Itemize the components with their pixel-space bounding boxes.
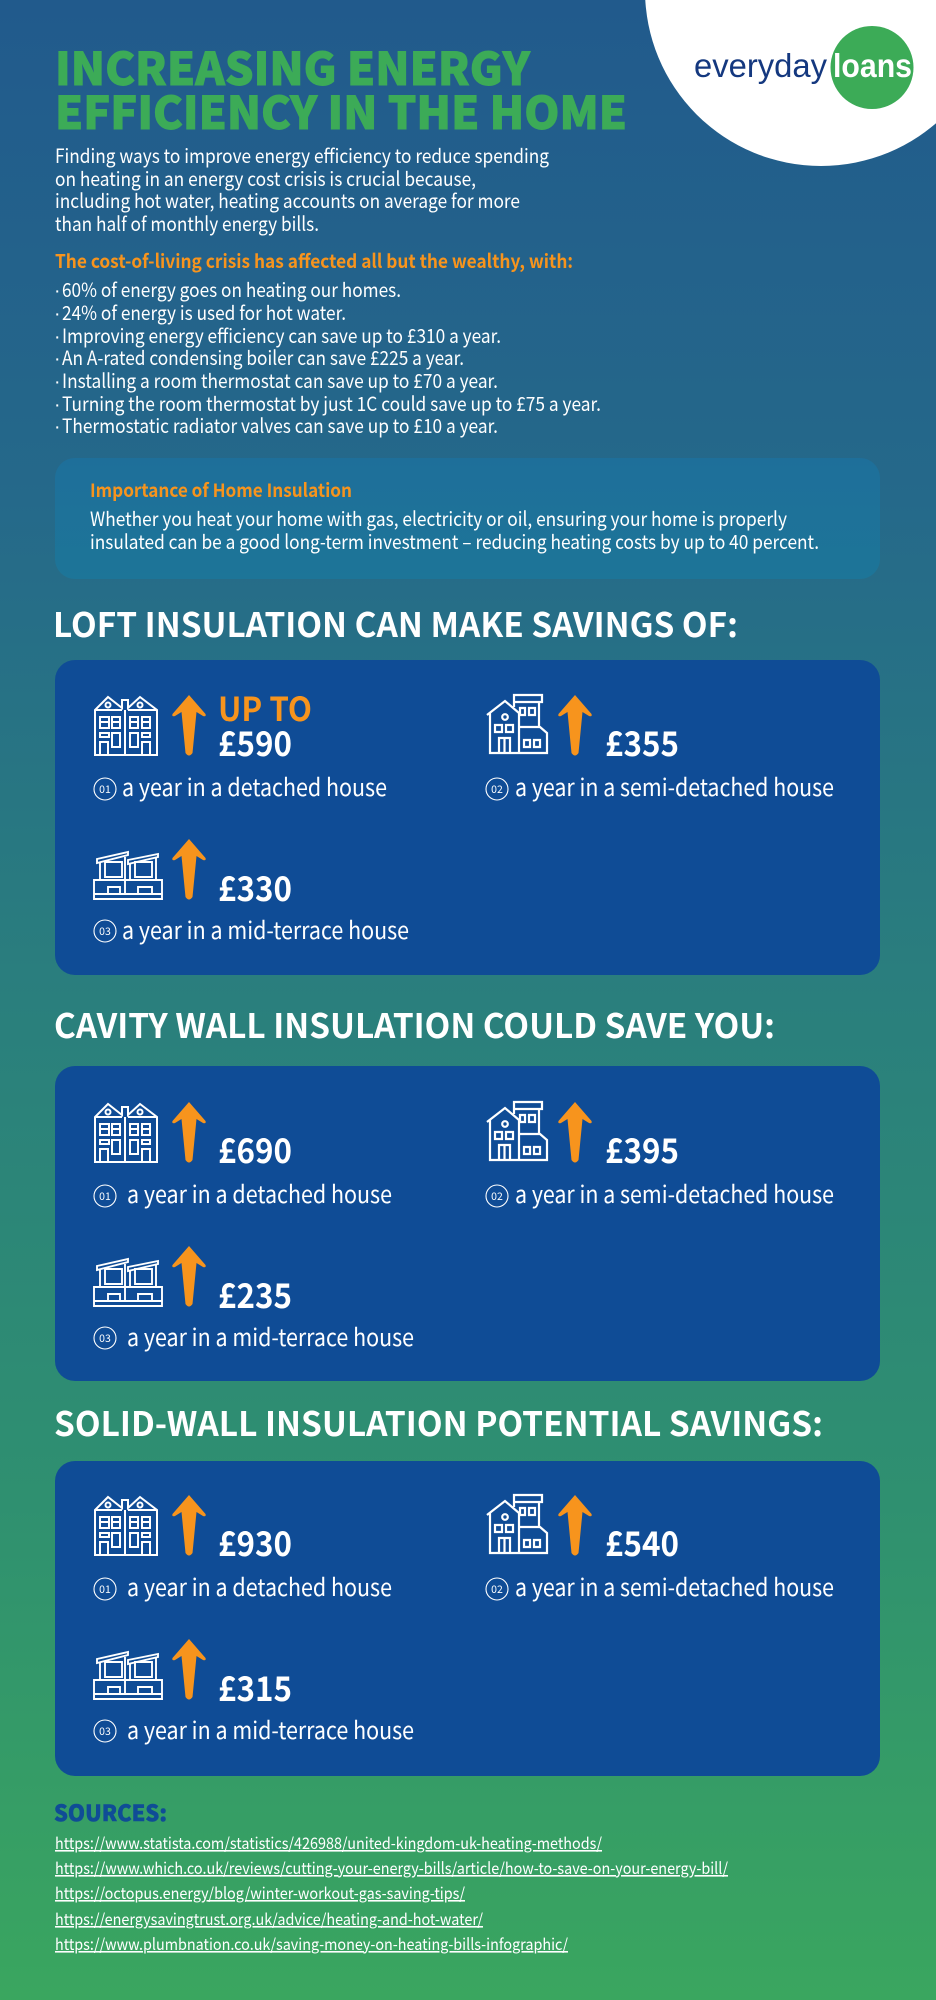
mid-terrace house saving — [94, 1639, 414, 1746]
detached house saving: a year in a detached house — [127, 1568, 392, 1603]
logo badge: loans — [833, 47, 912, 84]
bullet list: Improving energy efficiency can save up to £310 a year. — [62, 320, 501, 349]
semi-detached house saving — [486, 1495, 834, 1603]
bullet list: Thermostatic radiator valves can save up to £10 a year. — [62, 410, 498, 439]
heading: loft insulation: LOFT INSULATION CAN MAKE SAVINGS OF: — [53, 598, 738, 647]
intro paragraph: than half of monthly energy bills. — [55, 208, 319, 237]
detached house saving: £590 — [218, 717, 292, 766]
sources list — [55, 1830, 729, 1955]
heading: cavity wall insulation: CAVITY WALL INSULATION COULD SAVE YOU: — [54, 999, 775, 1048]
logo badge: everyday — [694, 47, 827, 84]
detached house saving: a year in a detached house — [122, 768, 387, 803]
semi-detached house saving: £355 — [605, 717, 679, 766]
semi-detached house saving: a year in a semi-detached house — [515, 1568, 834, 1603]
panel: cavity wall insulation — [55, 1066, 880, 1381]
sources list: https://www.statista.com/statistics/426988/united-kingdom-uk-heating-methods/ — [55, 1830, 603, 1854]
detached house saving: £690 — [218, 1124, 292, 1173]
mid-terrace house saving: 03 — [99, 1724, 111, 1739]
semi-detached house saving — [486, 695, 834, 803]
bullet list: · — [54, 280, 60, 302]
panel: importance of home insulation: Importance of Home Insulation — [90, 477, 352, 503]
semi-detached house saving: a year in a semi-detached house — [515, 768, 834, 803]
mid-terrace house saving: 03 — [99, 924, 111, 939]
semi-detached house saving: a year in a semi-detached house — [515, 1175, 834, 1210]
sources list: https://energysavingtrust.org.uk/advice/heating-and-hot-water/ — [55, 1906, 484, 1930]
detached house saving: a year in a detached house — [127, 1175, 392, 1210]
panel: loft insulation — [55, 660, 880, 975]
detached house saving — [94, 1102, 392, 1210]
mid-terrace house saving: 03 — [99, 1331, 111, 1346]
panel: solid-wall insulation — [55, 1461, 880, 1776]
mid-terrace house saving: a year in a mid-terrace house — [127, 1318, 414, 1353]
logo badge — [645, 0, 936, 166]
mid-terrace house saving: £315 — [218, 1662, 292, 1711]
heading: solid-wall insulation: SOLID-WALL INSULATION POTENTIAL SAVINGS: — [54, 1397, 823, 1446]
bullet list: 24% of energy is used for hot water. — [62, 297, 346, 326]
bullet list: 60% of energy goes on heating our homes. — [62, 274, 401, 303]
panel: importance of home insulation: Whether you heat your home with gas, electricity or oil, ensuring your home is properly — [90, 503, 787, 532]
mid-terrace house saving: a year in a mid-terrace house — [122, 911, 409, 946]
sources heading: SOURCES: — [54, 1796, 167, 1828]
detached house saving: UP TO — [218, 683, 312, 731]
bullet list: An A-rated condensing boiler can save £225 a year. — [62, 342, 464, 371]
mid-terrace house saving: £235 — [218, 1269, 292, 1318]
bullet list: Turning the room thermostat by just 1C could save up to £75 a year. — [62, 388, 601, 417]
detached house saving: £930 — [218, 1517, 292, 1566]
detached house saving — [94, 1495, 392, 1603]
intro paragraph — [55, 140, 549, 237]
detached house saving: 01 — [99, 1582, 111, 1597]
semi-detached house saving: 02 — [491, 782, 503, 797]
detached house saving — [94, 683, 387, 803]
sources list: https://octopus.energy/blog/winter-workout-gas-saving-tips/ — [55, 1880, 466, 1904]
mid-terrace house saving — [94, 1246, 414, 1353]
bullet list — [54, 274, 601, 439]
bullet list: · — [54, 394, 60, 416]
detached house saving: 01 — [99, 1189, 111, 1204]
semi-detached house saving: 02 — [491, 1189, 503, 1204]
panel: importance of home insulation: insulated can be a good long-term investment – reducing heating costs by up to 40 percent. — [90, 526, 819, 555]
semi-detached house saving: 02 — [491, 1582, 503, 1597]
bullet list: · — [54, 416, 60, 438]
sources list: https://www.which.co.uk/reviews/cutting-your-energy-bills/article/how-to-save-on-your-energy-bill/ — [55, 1855, 729, 1879]
bullet list: Installing a room thermostat can save up to £70 a year. — [62, 365, 498, 394]
intro paragraph: Finding ways to improve energy efficiency to reduce spending — [55, 140, 549, 169]
bullet list: · — [54, 348, 60, 370]
detached house saving: 01 — [99, 782, 111, 797]
title — [55, 33, 627, 142]
semi-detached house saving: £540 — [605, 1517, 679, 1566]
title: EFFICIENCY IN THE HOME — [55, 77, 627, 142]
panel: importance of home insulation — [55, 458, 880, 579]
bullet list: · — [54, 303, 60, 325]
bullet list: · — [54, 326, 60, 348]
mid-terrace house saving: £330 — [218, 862, 292, 911]
bullet list: · — [54, 371, 60, 393]
mid-terrace house saving — [94, 839, 409, 946]
intro paragraph: including hot water, heating accounts on average for more — [55, 185, 520, 214]
title: INCREASING ENERGY — [55, 33, 531, 98]
intro paragraph: on heating in an energy cost crisis is crucial because, — [55, 163, 476, 192]
mid-terrace house saving: a year in a mid-terrace house — [127, 1711, 414, 1746]
semi-detached house saving: £395 — [605, 1124, 679, 1173]
semi-detached house saving — [486, 1102, 834, 1210]
sources list: https://www.plumbnation.co.uk/saving-money-on-heating-bills-infographic/ — [55, 1931, 569, 1955]
orange subheading: The cost-of-living crisis has affected all but the wealthy, with: — [55, 247, 573, 274]
